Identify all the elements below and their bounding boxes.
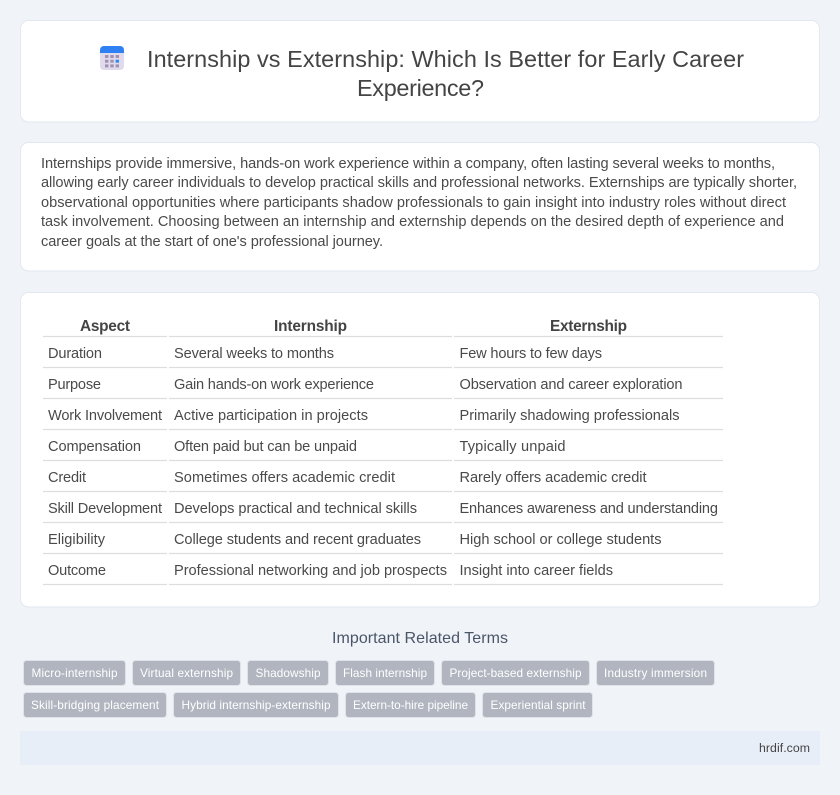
row: outcome: Insight into career fields (460, 563, 613, 579)
row: skill development: Skill Development (48, 501, 162, 517)
row: purpose: Purpose (48, 377, 101, 393)
row: skill development: Enhances awareness and understanding (460, 501, 718, 517)
row: work involvement: Active participation in projects (174, 408, 368, 424)
panel: comparison table (20, 292, 820, 607)
row: eligibility: Eligibility (48, 532, 106, 548)
tag list: related terms (24, 660, 714, 718)
row: work involvement: Primarily shadowing professionals (460, 408, 680, 424)
row: duration: Duration (48, 346, 102, 362)
row: duration (48, 346, 602, 362)
tag list: related terms: Industry immersion (604, 666, 707, 680)
text block: description paragraph: Internships provide immersive, hands-on work experience within a company, often lasting several weeks to months, (41, 156, 775, 172)
tag list: related terms: Project-based externship (450, 666, 582, 680)
heading: important related terms: Important Related Terms (332, 630, 508, 647)
row: outcome: Outcome (48, 563, 106, 579)
row: duration: Several weeks to months (174, 346, 334, 362)
tag list: related terms: Flash internship (343, 666, 427, 680)
row: credit: Sometimes offers academic credit (174, 470, 395, 486)
table header: Externship (550, 318, 627, 335)
panel: description (20, 142, 820, 271)
tag list: related terms: Skill-bridging placement (31, 698, 160, 712)
row: work involvement (48, 408, 680, 424)
tag list: related terms: Virtual externship (140, 666, 233, 680)
row: purpose (48, 377, 682, 393)
tag list: related terms: Extern-to-hire pipeline (353, 698, 468, 712)
row: compensation: Typically unpaid (460, 439, 566, 455)
row: credit (48, 470, 646, 486)
table header: Internship (274, 318, 347, 335)
row: skill development (48, 501, 718, 517)
text block: description paragraph: allowing early career individuals to develop practical skills and professional networks. Externships are typically shorter, (41, 175, 797, 191)
row: purpose: Gain hands-on work experience (174, 377, 374, 393)
row: outcome (48, 563, 613, 579)
row: work involvement: Work Involvement (48, 408, 162, 424)
row: duration: Few hours to few days (460, 346, 602, 362)
text block: description paragraph: task involvement. Choosing between an internship and externship depends on the desired depth of experience and (41, 214, 784, 230)
row: compensation (48, 439, 566, 455)
row: compensation: Compensation (48, 439, 141, 455)
title: Internship vs Externship: Which Is Better for Early Career (147, 46, 744, 72)
row: skill development: Develops practical and technical skills (174, 501, 417, 517)
table header (80, 318, 627, 335)
title: Experience? (357, 75, 484, 101)
panel: title card (20, 20, 820, 122)
title (147, 46, 744, 101)
row: credit: Rarely offers academic credit (460, 470, 646, 486)
text block: description paragraph: career goals at the start of one's professional journey. (41, 234, 383, 250)
row: credit: Credit (48, 470, 86, 486)
table header: Aspect (80, 318, 130, 335)
tag list: related terms: Hybrid internship-externship (182, 698, 331, 712)
row: compensation: Often paid but can be unpaid (174, 439, 357, 455)
tag list: related terms: Experiential sprint (490, 698, 586, 712)
icon: calendar (100, 46, 124, 70)
footer (20, 731, 820, 765)
row: eligibility (48, 532, 662, 548)
footer credit: hrdif.com (759, 741, 810, 755)
row: eligibility: High school or college students (460, 532, 662, 548)
tag list: related terms: Micro-internship (32, 666, 118, 680)
tag list: related terms: Shadowship (256, 666, 321, 680)
row: eligibility: College students and recent graduates (174, 532, 421, 548)
text block: description paragraph: observational opportunities where participants shadow professionals to gain insight into industry roles without direct (41, 195, 786, 211)
row: purpose: Observation and career exploration (460, 377, 682, 393)
text block: description paragraph (41, 156, 797, 250)
row: outcome: Professional networking and job prospects (174, 563, 447, 579)
